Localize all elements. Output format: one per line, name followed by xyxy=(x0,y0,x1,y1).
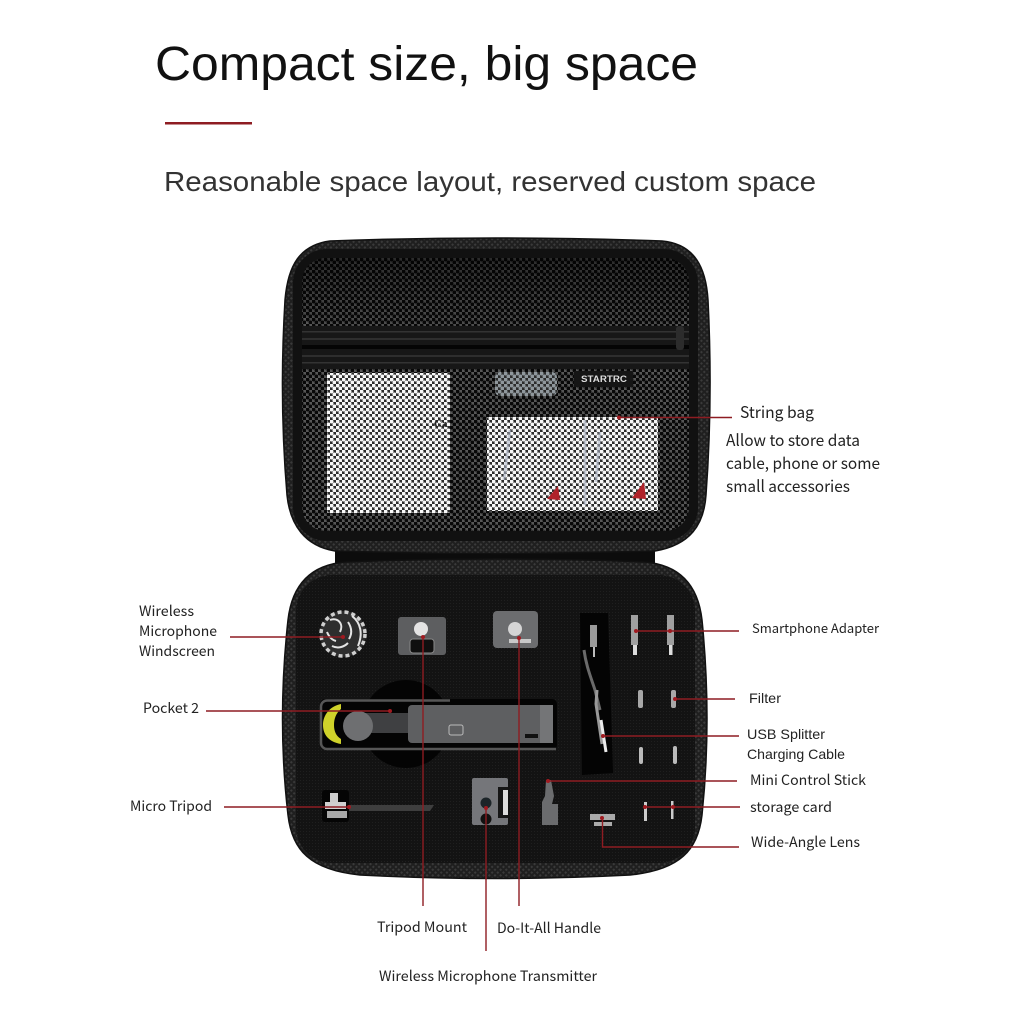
label: wireless microphone windscreen xyxy=(139,601,217,661)
text block: string bag description: cable, phone or some xyxy=(726,450,880,474)
icon: wireless microphone transmitter xyxy=(472,778,508,825)
icon: tripod mount xyxy=(398,617,446,655)
label: micro tripod: Micro Tripod xyxy=(130,796,212,816)
callout lines xyxy=(206,418,740,951)
icon: mini control stick xyxy=(542,780,558,825)
label: wireless microphone windscreen: Windscreen xyxy=(139,641,215,661)
label: wireless microphone transmitter: Wireless Microphone Transmitter xyxy=(379,966,598,986)
panel: upper case lid with string bag xyxy=(282,238,710,554)
icon: smartphone adapters xyxy=(631,615,674,655)
text block: string bag description xyxy=(726,427,880,497)
label: USB splitter charging cable: USB Splitter xyxy=(747,726,825,742)
panel: case hinge xyxy=(335,545,655,567)
label: pocket 2: Pocket 2 xyxy=(143,698,199,718)
label: wide-angle lens: Wide-Angle Lens xyxy=(751,832,860,852)
label: storage card: storage card xyxy=(750,797,832,817)
panel: lower case with foam insert xyxy=(282,559,707,878)
icon: USB splitter charging cable in cutout xyxy=(580,613,613,775)
title underline xyxy=(165,122,252,124)
icon: wireless microphone windscreen xyxy=(320,611,366,657)
label: USB splitter charging cable: Charging Cable xyxy=(747,746,845,762)
label: tripod mount: Tripod Mount xyxy=(377,917,468,937)
white card behind mesh, left xyxy=(327,373,450,513)
icon: do-it-all handle xyxy=(493,611,538,648)
label: do-it-all handle: Do-It-All Handle xyxy=(497,918,601,938)
brand tag xyxy=(574,371,633,387)
icon: wide-angle lens xyxy=(590,814,615,826)
label: string bag: String bag xyxy=(740,399,814,423)
label: filter: Filter xyxy=(749,690,781,706)
icon: gimbal cutout circle xyxy=(362,680,450,768)
subtitle: Reasonable space layout, reserved custom space xyxy=(164,166,816,197)
mesh back panel xyxy=(302,258,689,531)
white card behind mesh, right xyxy=(487,417,658,511)
small card behind mesh xyxy=(495,372,557,396)
icon: micro tripod xyxy=(322,790,434,822)
text block: string bag description: Allow to store data xyxy=(726,427,860,451)
label: mini control stick: Mini Control Stick xyxy=(750,770,866,790)
text block: string bag description: small accessories xyxy=(726,473,850,497)
zipper band xyxy=(302,326,689,369)
brand tag: STARTRC xyxy=(581,374,628,384)
callout dots xyxy=(341,416,677,820)
white card behind mesh, left: Ca xyxy=(434,418,448,430)
icon: filters xyxy=(638,690,677,764)
icon: storage cards xyxy=(644,801,674,821)
label: smartphone adapter: Smartphone Adapter xyxy=(752,618,880,637)
label: wireless microphone windscreen: Wireless xyxy=(139,601,194,621)
icon: Pocket 2 camera xyxy=(320,699,557,750)
title: Compact size, big space xyxy=(155,38,698,91)
label: wireless microphone windscreen: Microphone xyxy=(139,621,217,641)
label: USB splitter charging cable xyxy=(747,726,845,762)
